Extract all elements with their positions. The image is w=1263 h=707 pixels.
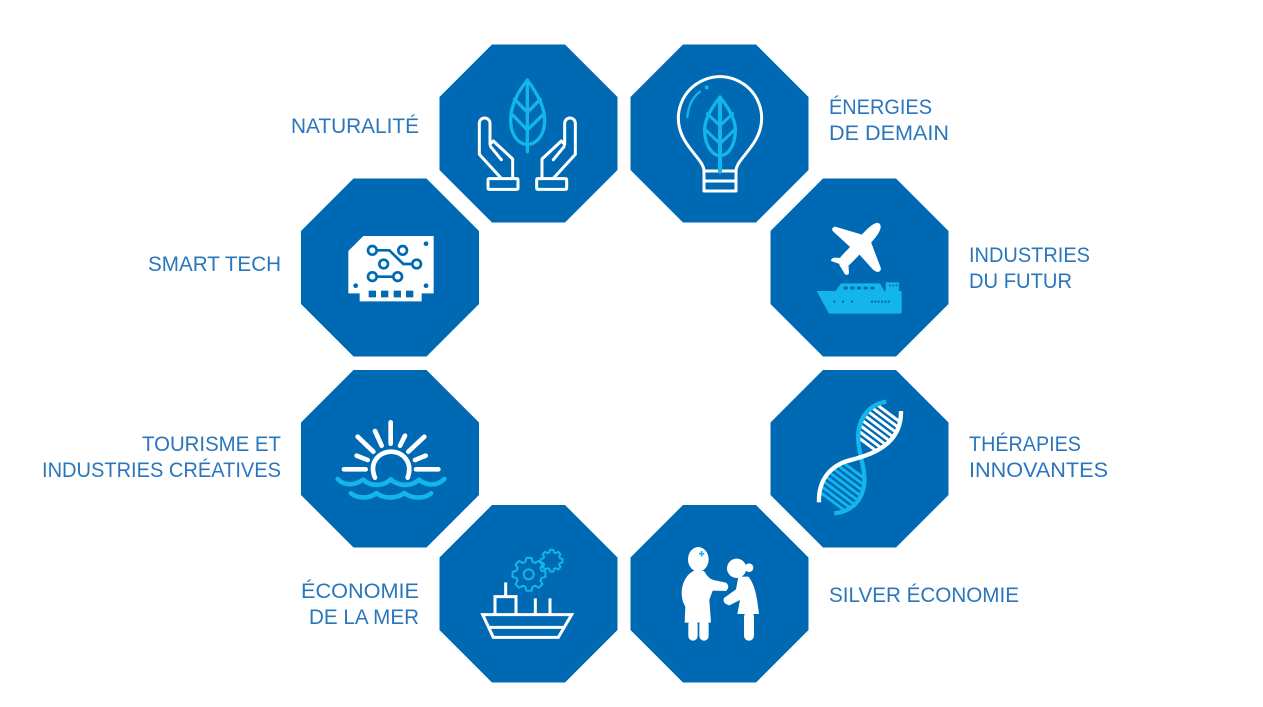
- octagon: [630, 505, 808, 682]
- octagon: [440, 505, 618, 682]
- label: NATURALITÉ: [291, 113, 419, 138]
- label: [969, 243, 1090, 293]
- icon: hands holding leaf: [479, 80, 575, 189]
- icon: ship and gears: [483, 550, 572, 637]
- label: [42, 432, 281, 482]
- panel: énergies de demain: [630, 44, 949, 222]
- label: ÉCONOMIE: [301, 578, 419, 603]
- octagon: [301, 370, 479, 548]
- octagon: [630, 44, 808, 222]
- panel: économie de la mer: [301, 505, 618, 682]
- label: THÉRAPIES: [969, 431, 1081, 456]
- octagon: [770, 178, 948, 356]
- label: INDUSTRIES: [969, 243, 1090, 267]
- label: [829, 94, 949, 145]
- icon: sun over waves: [338, 422, 444, 498]
- icon: plane and ship: [817, 223, 902, 314]
- label: [301, 578, 419, 629]
- panel: industries du futur: [770, 178, 1090, 356]
- label: [969, 431, 1108, 482]
- label: DE LA MER: [309, 605, 419, 629]
- octagon: [301, 178, 479, 356]
- label: SMART TECH: [148, 252, 281, 276]
- label: INDUSTRIES CRÉATIVES: [42, 457, 281, 482]
- icon: light bulb with leaf: [678, 77, 762, 191]
- label: TOURISME ET: [142, 432, 281, 456]
- panel: silver économie: [630, 505, 1019, 682]
- panel: smart tech: [148, 178, 479, 356]
- icon: nurse and elderly person: [682, 547, 759, 641]
- label: INNOVANTES: [969, 458, 1108, 482]
- icon: circuit board: [348, 236, 434, 301]
- panel: tourisme et industries créatives: [42, 370, 479, 548]
- panel: naturalité: [291, 44, 618, 222]
- label: ÉNERGIES: [829, 94, 932, 119]
- label: DU FUTUR: [969, 269, 1072, 293]
- label: DE DEMAIN: [829, 121, 949, 145]
- panel: thérapies innovantes: [770, 370, 1108, 548]
- label: SILVER ÉCONOMIE: [829, 582, 1019, 607]
- icon: DNA helix: [816, 400, 904, 516]
- octagon: [440, 44, 618, 222]
- octagon: [770, 370, 948, 548]
